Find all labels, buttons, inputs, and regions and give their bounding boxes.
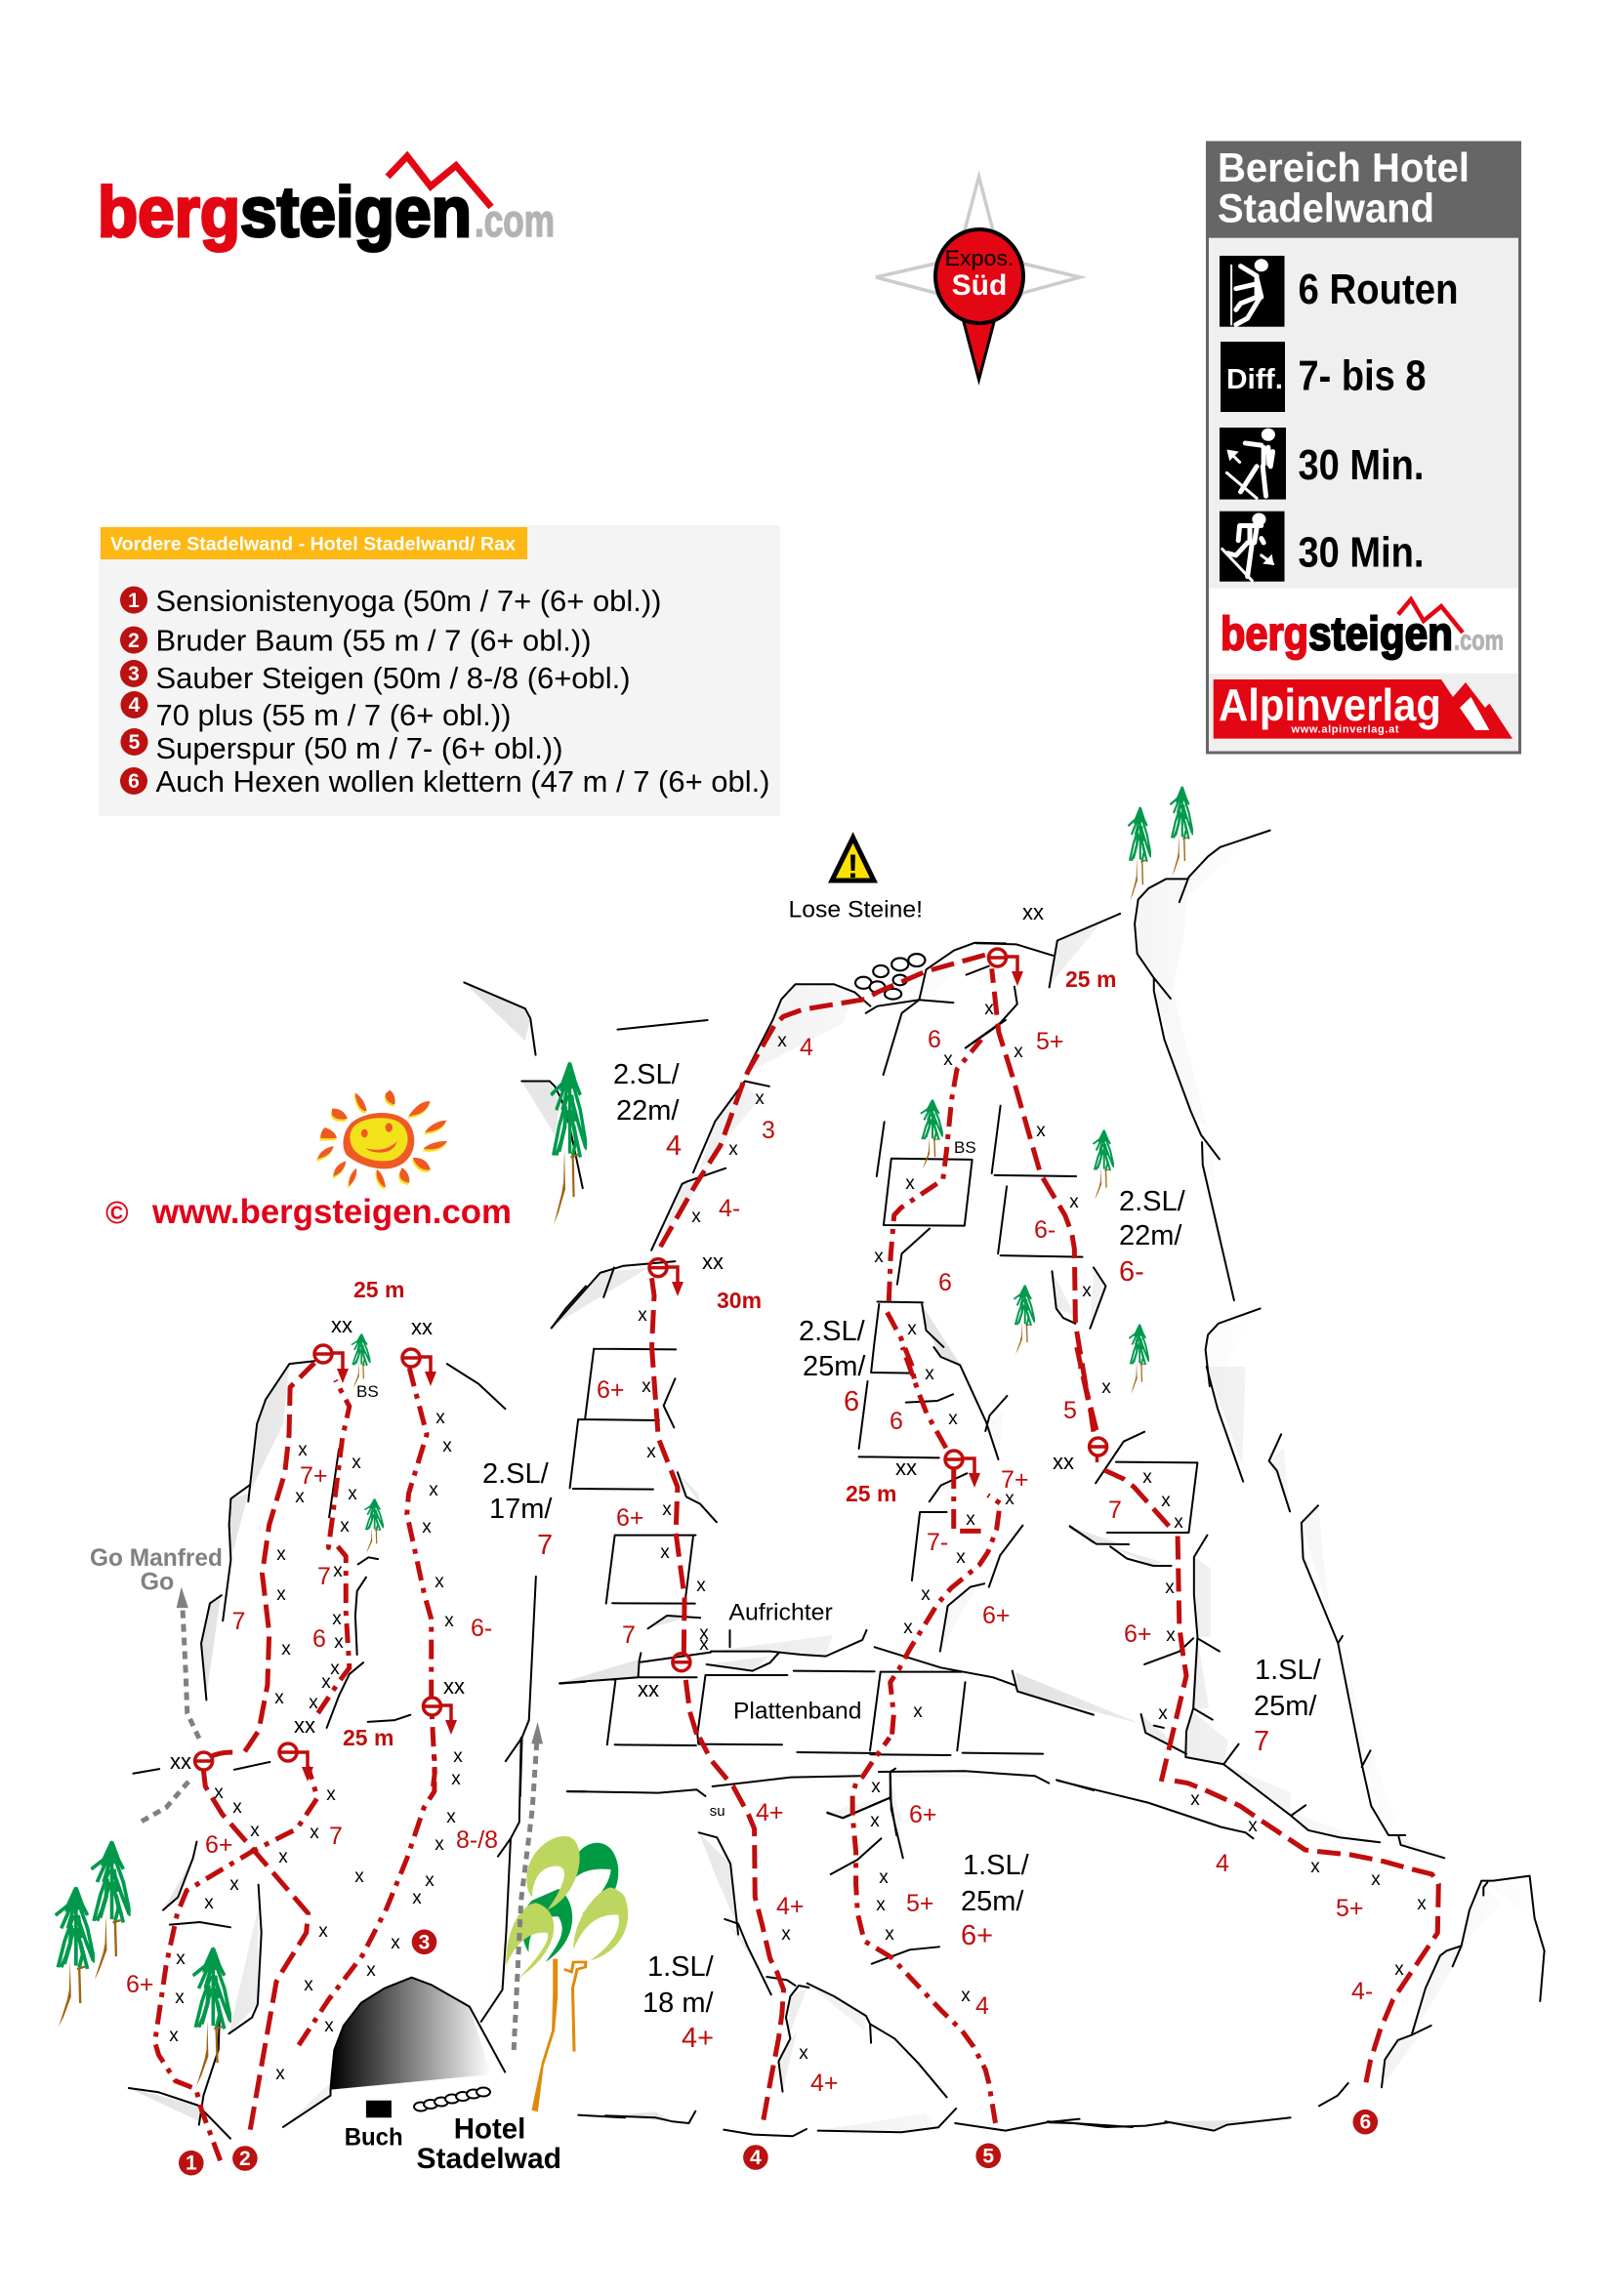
pitch grades: 6 bbox=[890, 1408, 903, 1435]
panel: area facts bbox=[1206, 142, 1520, 753]
logo: bergsteigen small bbox=[1209, 589, 1518, 674]
pitch grades: 7- bbox=[927, 1529, 948, 1556]
belay anchor marks: xx bbox=[294, 1713, 315, 1738]
warning: loose rocks: ! bbox=[848, 848, 858, 885]
pitch grades: 4 bbox=[800, 1034, 813, 1061]
route start numbers bbox=[179, 1929, 1378, 2175]
pitch summaries: 2.SL/ bbox=[482, 1458, 550, 1490]
pitch summaries: 2.SL/ bbox=[799, 1316, 866, 1347]
pitch summaries: 1.SL/ bbox=[963, 1850, 1030, 1881]
logo: bergsteigen.com: steigen bbox=[240, 174, 472, 252]
pitch summaries: 25m/ bbox=[1254, 1691, 1317, 1722]
label: Hotel Stadelwad bbox=[416, 2113, 561, 2175]
logo: bergsteigen small: berg bbox=[1221, 609, 1308, 660]
abseil lengths: 25 m bbox=[353, 1277, 404, 1302]
label: Hotel Stadelwad: Hotel bbox=[454, 2113, 525, 2146]
abseil lengths: 25 m bbox=[343, 1725, 393, 1750]
logo: bergsteigen small: steigen bbox=[1308, 609, 1453, 660]
belay anchor marks: xx bbox=[1053, 1450, 1074, 1474]
pitch grades: 7 bbox=[329, 1823, 343, 1850]
compass: exposure south: Süd bbox=[952, 269, 1007, 302]
pitch summaries: 7 bbox=[1254, 1726, 1269, 1757]
logo: bergsteigen.com: .com bbox=[475, 195, 555, 246]
warning: loose rocks bbox=[789, 838, 923, 923]
pitch grades: 7 bbox=[317, 1563, 331, 1590]
pitch grades: 7+ bbox=[1001, 1466, 1029, 1494]
pitch grades: 7 bbox=[232, 1608, 245, 1635]
icon: difficulty bbox=[1221, 342, 1285, 412]
pitch grades: 5+ bbox=[906, 1890, 934, 1917]
route start numbers: 6 bbox=[1359, 2112, 1371, 2134]
belay stations with abseil arrows bbox=[195, 949, 1107, 1782]
stat: approach time: 30 Min. bbox=[1299, 441, 1424, 489]
pitch grades: 6+ bbox=[597, 1376, 625, 1404]
compass: exposure south bbox=[876, 177, 1080, 380]
pitch grades: 7+ bbox=[300, 1462, 328, 1490]
icon: descent hiker bbox=[1220, 512, 1285, 582]
pitch grades: 7 bbox=[622, 1621, 636, 1649]
stat: difficulty: 7- bis 8 bbox=[1299, 352, 1426, 400]
pitch summaries: 22m/ bbox=[616, 1095, 680, 1127]
panel header bbox=[1206, 142, 1520, 238]
pitch summaries: 2.SL/ bbox=[1119, 1186, 1186, 1217]
route list entries: 4 bbox=[129, 694, 141, 717]
list heading bbox=[101, 527, 527, 559]
symbol: route book: Buch bbox=[345, 2124, 403, 2152]
pitch grades: 6 bbox=[938, 1269, 952, 1296]
icon: loose rocks bbox=[855, 954, 925, 1000]
pitch summaries: 4 bbox=[666, 1130, 682, 1162]
abseil lengths bbox=[343, 966, 1116, 1750]
pitch summaries: 22m/ bbox=[1119, 1220, 1182, 1251]
pitch summaries: 7 bbox=[537, 1530, 553, 1561]
route 4: 70 plus bbox=[651, 954, 989, 2120]
pitch summaries: 25m/ bbox=[803, 1351, 866, 1382]
route start numbers: 3 bbox=[419, 1931, 430, 1953]
label: Go Manfred Go: Go bbox=[141, 1569, 174, 1596]
logo: bergsteigen.com bbox=[98, 156, 555, 252]
pitch grades: 6+ bbox=[205, 1831, 233, 1859]
pitch grades: 6 bbox=[928, 1026, 941, 1053]
belay anchor marks: xx bbox=[331, 1313, 352, 1337]
pitch summaries: 6- bbox=[1119, 1256, 1144, 1288]
arrow: Go Manfred Go approach bbox=[137, 1587, 201, 1824]
pitch summaries: 2.SL/ bbox=[613, 1059, 681, 1090]
abseil lengths: 25 m bbox=[1065, 966, 1116, 992]
route start numbers: 5 bbox=[982, 2145, 994, 2167]
route start numbers: 4 bbox=[750, 2147, 762, 2169]
route list entries: 5 bbox=[129, 731, 141, 754]
pitch grades: 6+ bbox=[982, 1602, 1011, 1629]
rock face shading bbox=[129, 838, 1545, 2132]
place labels: BS bbox=[954, 1138, 976, 1157]
route list entries: Sensionistenyoga (50m / 7+ (6+ obl.)) bbox=[156, 584, 662, 618]
panel header: Bereich Hotel bbox=[1218, 144, 1470, 190]
pitch grades: 4 bbox=[1216, 1850, 1229, 1877]
logo: Alpinverlag: www.alpinverlag.at bbox=[1291, 724, 1399, 736]
symbol: chain of stones bbox=[414, 2087, 490, 2111]
stat: descent time: 30 Min. bbox=[1299, 529, 1424, 576]
bolts: xxxxxxxxxxxxxxxxxxxxxxxxxxxxxxxxxxxxxxxxxxxxx bbox=[169, 1408, 463, 2084]
belay anchor marks: xx bbox=[638, 1677, 659, 1702]
pitch summaries: 17m/ bbox=[489, 1494, 553, 1525]
abseil lengths: 25 m bbox=[846, 1481, 896, 1506]
pitch summaries: 6+ bbox=[961, 1920, 993, 1951]
pitch grades: 6+ bbox=[1124, 1620, 1152, 1648]
place labels: Aufrichter bbox=[728, 1599, 833, 1625]
route list entries: 1 bbox=[128, 590, 140, 612]
label: Go Manfred Go bbox=[90, 1544, 223, 1596]
pitch grades: 5 bbox=[1063, 1397, 1077, 1424]
pitch grades: 4+ bbox=[756, 1799, 784, 1826]
place labels: su bbox=[710, 1803, 725, 1820]
pitch grades: 6 bbox=[312, 1625, 326, 1653]
route list entries: 2 bbox=[128, 630, 140, 652]
pitch grades: 6+ bbox=[126, 1971, 154, 1998]
list heading: Vordere Stadelwand - Hotel Stadelwand/ Rax bbox=[110, 535, 516, 555]
pitch summaries bbox=[482, 1059, 1322, 2054]
panel: route list bbox=[99, 525, 780, 816]
pitch grades: 6+ bbox=[909, 1801, 937, 1828]
pitch grades: 7 bbox=[1108, 1496, 1122, 1524]
route 1: Sensionistenyoga bbox=[155, 1380, 350, 2160]
belay anchor marks: xx bbox=[702, 1250, 724, 1274]
route list entries: 3 bbox=[128, 663, 140, 685]
label: Go Manfred Go: Go Manfred bbox=[90, 1544, 223, 1572]
pitch grades: 4+ bbox=[810, 2070, 839, 2097]
logo: Alpinverlag: Alpinverlag bbox=[1219, 679, 1441, 730]
route list entries: Superspur (50 m / 7- (6+ obl.)) bbox=[156, 731, 562, 765]
panel header: Stadelwand bbox=[1218, 185, 1434, 230]
shape: start rock with gradient bbox=[331, 1978, 506, 2090]
pitch summaries: 6 bbox=[844, 1386, 859, 1417]
logo: bergsteigen small: .com bbox=[1454, 625, 1504, 656]
route 3: Sauber Steigen bbox=[299, 1368, 435, 2045]
pitch grades: 4 bbox=[975, 1992, 989, 2020]
logo: bergsteigen.com: berg bbox=[98, 174, 240, 252]
route list entries: 70 plus (55 m / 7 (6+ obl.)) bbox=[156, 698, 512, 732]
route list entries: Auch Hexen wollen klettern (47 m / 7 (6+ obl.) bbox=[156, 764, 769, 799]
pitch summaries: 1.SL/ bbox=[1255, 1655, 1322, 1686]
trees bbox=[56, 786, 1193, 2086]
pitch summaries: 18 m/ bbox=[642, 1988, 714, 2019]
abseil lengths: 30m bbox=[717, 1288, 762, 1313]
place labels: Plattenband bbox=[733, 1699, 861, 1725]
belay anchor marks: xx bbox=[170, 1749, 191, 1774]
route list entries bbox=[120, 584, 769, 799]
stat: routes: 6 Routen bbox=[1299, 266, 1459, 313]
place labels bbox=[356, 1138, 976, 1820]
pitch summaries: 25m/ bbox=[961, 1886, 1024, 1917]
icon: difficulty: Diff. bbox=[1226, 364, 1283, 395]
pitch grades: 4- bbox=[1351, 1978, 1373, 2005]
pitch grades: 5+ bbox=[1036, 1028, 1064, 1055]
route 6: Auch Hexen wollen klettern bbox=[992, 968, 1438, 2082]
route list entries: Bruder Baum (55 m / 7 (6+ obl.)) bbox=[156, 623, 592, 658]
pitch grades: 6- bbox=[471, 1615, 492, 1642]
symbol: route book bbox=[345, 2101, 403, 2152]
route list entries: 6 bbox=[128, 770, 140, 793]
route start numbers: 2 bbox=[239, 2148, 251, 2170]
compass: exposure south: Expos. bbox=[945, 246, 1014, 270]
rock face outlines bbox=[129, 831, 1545, 2139]
pitch grades: 4+ bbox=[776, 1893, 805, 1920]
route start numbers: 1 bbox=[186, 2152, 197, 2175]
icon: ascent hiker bbox=[1220, 428, 1286, 500]
pitch grades: 4- bbox=[719, 1195, 740, 1222]
arrow: descent path to start bbox=[514, 1722, 543, 2053]
icon: climber bbox=[1220, 256, 1285, 327]
pitch grades: 5+ bbox=[1336, 1895, 1364, 1922]
belay anchor marks: xx bbox=[443, 1674, 465, 1699]
pitch grades: 6+ bbox=[616, 1504, 644, 1532]
route 2: Bruder Baum bbox=[203, 1363, 314, 2130]
route list entries: Sauber Steigen (50m / 8-/8 (6+obl.) bbox=[156, 661, 631, 695]
bolts, upper and middle wall: xxxxxxxxxxxxxxxxxxxxxxxxxxxxxxxxxxxxxxxxxxxxxxxxxx bbox=[638, 999, 1427, 2064]
belay anchor marks bbox=[170, 900, 1074, 1774]
place labels: BS bbox=[356, 1382, 379, 1401]
route 5: Superspur bbox=[852, 1040, 1000, 2123]
belay anchor marks: xx bbox=[411, 1315, 433, 1339]
pitch summaries: 1.SL/ bbox=[647, 1951, 715, 1983]
pitch grades: 3 bbox=[762, 1117, 775, 1144]
pitch grades bbox=[126, 1026, 1373, 2097]
belay anchor marks: xx bbox=[895, 1456, 917, 1480]
pitch grades: 6- bbox=[1034, 1216, 1056, 1244]
belay anchor marks: xx bbox=[1022, 900, 1044, 924]
pitch summaries: 4+ bbox=[682, 2023, 714, 2054]
icon: sun bbox=[316, 1090, 447, 1190]
copyright url: www.bergsteigen.com bbox=[151, 1193, 512, 1231]
icon: leafy tree bbox=[506, 1836, 628, 2112]
copyright url: © bbox=[105, 1195, 129, 1230]
label: Hotel Stadelwad: Stadelwad bbox=[416, 2143, 561, 2175]
warning: loose rocks: Lose Steine! bbox=[789, 897, 923, 923]
pitch grades: 8-/8 bbox=[456, 1826, 498, 1854]
